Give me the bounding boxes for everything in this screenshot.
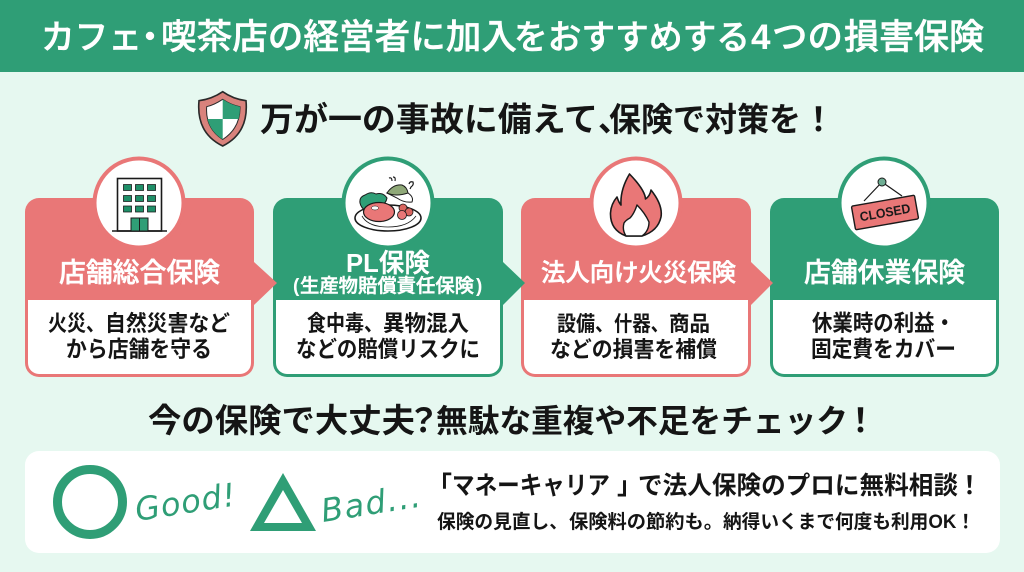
callout detail: 保険料の節約も。 xyxy=(569,511,723,533)
card title: 店舗総合保険 xyxy=(59,258,220,288)
callout headline: ！ xyxy=(957,472,982,500)
panel: 法人向け火災保険 xyxy=(521,158,751,377)
check heading: ！ xyxy=(844,402,877,439)
callout detail: 納得いくまで何度も利用OK！ xyxy=(723,511,975,533)
icon: triangle bad xyxy=(250,473,316,531)
card subtitle: ) xyxy=(476,276,482,297)
card description: 什器、 xyxy=(614,313,669,336)
icon: circle good xyxy=(58,470,122,534)
card title: 店舗休業保険 xyxy=(804,258,965,288)
card title: PL保険 xyxy=(346,248,430,278)
check heading xyxy=(148,402,877,439)
subtitle: ！ xyxy=(802,101,835,138)
callout headline: マネーキャリア xyxy=(452,472,610,500)
icon: food plate xyxy=(355,177,421,231)
label: Bad...: Bad... xyxy=(318,477,423,530)
callout detail xyxy=(437,511,975,533)
card description xyxy=(550,313,717,362)
callout detail: 保険の見直し、 xyxy=(437,511,568,533)
card description: から店舗を守る xyxy=(66,337,212,362)
card description: 自然災害など xyxy=(105,311,230,336)
icon: closed sign xyxy=(851,178,919,230)
title xyxy=(41,18,984,57)
card description: 固定費をカバー xyxy=(811,337,956,362)
arrow: card 3 to card 4 xyxy=(751,262,773,305)
callout headline: 」 xyxy=(617,472,642,500)
subtitle: 保険で対策を xyxy=(609,101,801,138)
panel: 店舗総合保険 xyxy=(25,158,254,377)
icon: flame xyxy=(610,174,661,236)
card description: 休業時の利益・ xyxy=(812,311,955,336)
card description: 異物混入 xyxy=(383,311,469,336)
card description xyxy=(296,311,480,362)
label: Good!: Good! xyxy=(132,476,238,529)
arrow: card 1 to card 2 xyxy=(254,262,277,305)
card description: 火災、 xyxy=(48,311,105,336)
check heading: 今の保険で大丈夫 xyxy=(148,402,415,439)
title: をおすすめする xyxy=(514,19,750,57)
subtitle: 、 xyxy=(598,101,631,138)
card description: 商品 xyxy=(669,313,710,336)
title: つの xyxy=(772,18,843,57)
callout headline: 「 xyxy=(427,472,452,500)
icon: closed sign: CLOSED xyxy=(859,201,911,224)
subtitle xyxy=(260,101,835,139)
callout headline xyxy=(427,472,982,500)
subtitle: 万が一の事故に備えて xyxy=(260,101,598,139)
callout headline: で法人保険のプロに無料相談 xyxy=(638,472,958,500)
title: 喫茶店の経営者に加入 xyxy=(161,18,517,57)
card description xyxy=(811,311,956,362)
card description: 設備、 xyxy=(557,313,614,336)
check heading: 無駄な重複や不足をチェック xyxy=(436,403,848,439)
header banner xyxy=(0,0,1024,72)
title: 4 xyxy=(751,18,771,57)
card description: 食中毒、 xyxy=(307,311,383,336)
card description xyxy=(48,311,230,362)
icon: building xyxy=(112,178,167,231)
card subtitle: 生産物賠償責任保険 xyxy=(300,275,474,297)
card subtitle: ( xyxy=(293,276,300,297)
panel: consultation callout xyxy=(25,451,1000,553)
card description: などの損害を補償 xyxy=(550,337,717,362)
title: 損害保険 xyxy=(844,18,984,57)
title: カフェ xyxy=(41,19,142,57)
icon: shield xyxy=(199,92,246,146)
panel: 店舗休業保険 xyxy=(770,158,999,377)
panel: PL保険 xyxy=(273,158,503,377)
card description: などの賠償リスクに xyxy=(296,337,480,362)
title: ・ xyxy=(133,19,167,57)
arrow: card 2 to card 3 xyxy=(503,262,525,305)
check heading: ？ xyxy=(407,402,440,439)
card title: 法人向け火災保険 xyxy=(541,259,736,287)
